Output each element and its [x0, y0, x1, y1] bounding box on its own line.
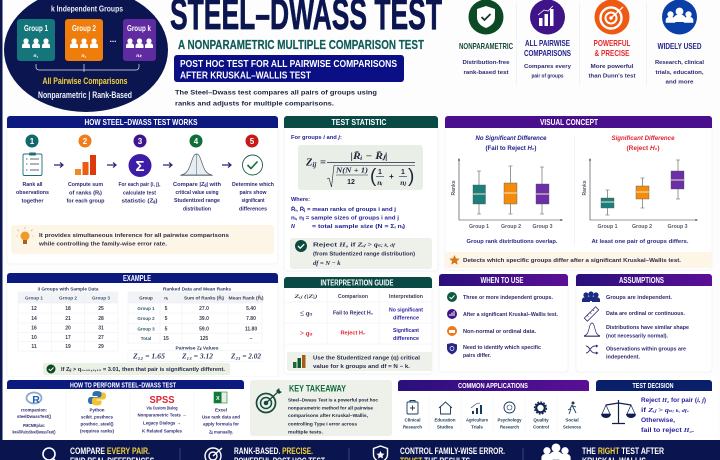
- message: rank-based precise: [234, 446, 326, 460]
- hero oval: k independent groups: Group 2: [72, 23, 96, 33]
- tool: Excel: Zᵢⱼ manually.: [209, 430, 233, 436]
- callout: significance rule: If Zᵢⱼ > q₀.₀₅,₃,₁₂ = 3.01, then that pair is significantly different.: [61, 367, 226, 373]
- message: compare every pair: [70, 446, 156, 460]
- application: agriculture trials: [466, 403, 488, 430]
- formula box: N(N + 1): [335, 168, 368, 174]
- table: sample data: Group 2: [59, 296, 77, 300]
- header: visual concept: VISUAL CONCEPT: [540, 117, 599, 127]
- step 2: for each group: [66, 198, 105, 204]
- step 5: differences: [239, 206, 267, 212]
- chart: significant difference: Group 3: [668, 224, 688, 230]
- table: sample data: 11: [31, 344, 37, 350]
- decision rule: [290, 238, 432, 269]
- table: ranked data: Group: [139, 296, 153, 300]
- definitions: = total sample size (N = Σᵢ nᵢ): [312, 224, 405, 230]
- table: ranked data: 5: [165, 326, 168, 332]
- table: sample data: 21: [65, 316, 71, 322]
- chart: no significant difference: Ranks: [451, 180, 457, 196]
- feature: all pairwise comparisons: pair of groups: [532, 74, 564, 80]
- application: quality control: Control: [533, 424, 549, 430]
- table: ranked data: 59.0: [199, 326, 209, 332]
- arrow: [163, 162, 172, 168]
- formula box: 1: [401, 169, 405, 176]
- feature: all pairwise comparisons: [524, 0, 571, 80]
- pairwise values: Z₁₃ = 3.12: [181, 352, 214, 360]
- hero oval: k independent groups: [4, 0, 168, 112]
- header: example: [7, 273, 278, 283]
- header: common applications: [398, 380, 589, 391]
- item: identify pairs: pairs differ.: [463, 353, 492, 359]
- table: sample data: 17: [65, 335, 71, 341]
- table: ranked data: 125: [200, 336, 208, 342]
- step 1: together: [22, 198, 44, 204]
- feature: nonparametric: Distribution-free: [462, 60, 510, 66]
- icon: balance scale: [601, 400, 636, 424]
- table: interpretation: Comparison: [338, 294, 368, 300]
- table: ranked data: Ranked Data and Mean Ranks: [163, 286, 231, 292]
- formula box: 12: [347, 179, 355, 186]
- callout: simultaneous inference: [11, 225, 274, 254]
- application: psychology research: Psychology: [498, 418, 522, 422]
- header: assumptions: ASSUMPTIONS: [619, 276, 665, 285]
- step 1: observations: [16, 190, 49, 196]
- decision text: Reject H₀ for pair ( i, j): [641, 398, 706, 404]
- callout: detects specific groups: Detects which specific groups differ after a significant Kruskal–Wallis test.: [463, 258, 681, 264]
- step 5: significant: [242, 198, 265, 204]
- table: interpretation: Interpretation: [389, 294, 423, 300]
- panel: common applications: [398, 380, 589, 430]
- table: sample data: 19: [65, 344, 71, 350]
- table: ranked data: 39.0: [199, 316, 209, 322]
- application: psychology research: Research: [500, 424, 519, 430]
- feature: powerful and precise: [588, 0, 636, 80]
- chart: no significant difference: Group 3: [532, 224, 553, 230]
- tool: SPSS: [138, 394, 186, 434]
- item: groups independent: Groups are independent.: [606, 295, 673, 301]
- formula box: ): [408, 166, 414, 187]
- item: identify pairs: Need to identify which specific: [463, 345, 541, 351]
- takeaway text: [288, 398, 378, 436]
- step 3: [118, 134, 161, 204]
- callout: studentized range: value for k groups and df = N − k.: [313, 364, 411, 370]
- application: psychology research: [498, 402, 522, 430]
- hero oval: k independent groups: n₂: [82, 53, 87, 59]
- footer band: [0, 440, 720, 460]
- arrow: [222, 162, 231, 168]
- table: sample data: 29: [98, 344, 104, 350]
- heading: key takeaway: KEY TAKEAWAY: [289, 384, 347, 394]
- panel: bottom white card background: [2, 377, 718, 439]
- step 4: 4: [194, 137, 199, 146]
- table: ranked data: 11.80: [245, 326, 257, 332]
- item: similar shape: [584, 323, 689, 340]
- table: sample data: 16: [31, 326, 37, 332]
- formula box: +: [389, 172, 394, 181]
- chart: significant difference: Ranks: [582, 180, 588, 196]
- step 4: [173, 134, 221, 212]
- step 3: 3: [138, 137, 143, 146]
- step 2: [66, 134, 105, 204]
- message: right test after Kruskal-Wallis: THE RIGHT TEST AFTER: [582, 446, 664, 456]
- table: sample data: 25: [98, 306, 104, 312]
- step 1: 1: [30, 137, 35, 146]
- hero oval: k independent groups: ...: [110, 35, 116, 44]
- tool: Excel: Use rank data and: [202, 414, 240, 420]
- table: sample data: [18, 286, 118, 351]
- step 2: of ranks (Rᵢ): [69, 190, 102, 196]
- tool: Python: [80, 391, 114, 434]
- step 5: pairs show: [240, 190, 267, 196]
- takeaway text: comparisons after Kruskal–Wallis,: [288, 413, 369, 419]
- message: control family-wise error: [400, 446, 505, 460]
- tool: Python: (requires ranks): [80, 428, 114, 434]
- takeaway text: controlling Type I error across: [288, 422, 357, 428]
- chart: significant difference: Group 1: [598, 224, 618, 230]
- icon: magnifier: [43, 448, 58, 460]
- feature: all pairwise comparisons: COMPARISONS: [524, 48, 571, 58]
- table: ranked data: Total: [141, 336, 151, 341]
- header: interpretation guide: [284, 277, 432, 288]
- formula box: Z: [306, 158, 312, 168]
- decision rule: (from Studentized range distribution): [313, 252, 415, 258]
- feature: widely used: [655, 0, 705, 86]
- table: sample data: 12: [31, 306, 37, 312]
- takeaway text: nonparametric method for all pairwise: [288, 406, 373, 412]
- header: test statistic: [284, 116, 438, 128]
- formula box: ij: [312, 161, 316, 169]
- step 1: Rank all: [22, 182, 43, 188]
- table: interpretation: Reject H₀: [340, 330, 366, 336]
- pairwise values: Pairwise Zᵢⱼ Values: [176, 346, 219, 352]
- table: sample data: 18: [65, 306, 71, 312]
- feature: all pairwise comparisons: Compares every: [524, 64, 571, 70]
- step 4: distribution: [183, 206, 211, 212]
- table: ranked data: 5: [165, 306, 168, 312]
- feature: widely used: WIDELY USED: [658, 41, 702, 51]
- label: groups: For groups i and j:: [291, 135, 342, 141]
- table: interpretation: > qα: [300, 328, 313, 338]
- item: observations independent: independent.: [606, 354, 641, 360]
- description: The Steel–Dwass test compares all pairs of groups using: [175, 90, 377, 96]
- feature: nonparametric: NONPARAMETRIC: [459, 41, 513, 51]
- application: social sciences: Social: [565, 418, 579, 422]
- tool: R: R: [32, 394, 40, 406]
- callout: simultaneous inference: while controlling the family-wise error rate.: [38, 242, 167, 248]
- decision text: if Zᵢⱼ > q α; k, df .: [641, 408, 689, 414]
- formula box: nᵢ: [377, 178, 383, 187]
- callout: simultaneous inference: It provides simultaneous inference for all pairwise comparisons: [39, 233, 229, 239]
- table: ranked data: –: [250, 336, 253, 342]
- tool: SPSS: Legacy Dialogs →: [143, 420, 181, 426]
- message: compare every pair: COMPARE EVERY PAIR.: [70, 446, 150, 456]
- application: education studies: Studies: [437, 424, 454, 430]
- table: ranked data: 5: [165, 316, 168, 322]
- tool: R: PMCMRplus:: [23, 423, 45, 428]
- table: interpretation: difference: [393, 336, 419, 342]
- pairwise values: Z₂₃ = 2.02: [230, 352, 262, 360]
- banner: post hoc test: [174, 55, 404, 82]
- step 1: [16, 134, 49, 204]
- table: ranked data: Group 3: [137, 326, 155, 332]
- table: interpretation: Significant: [393, 328, 419, 334]
- chart: no significant difference: (Fail to Reject H₀): [486, 146, 536, 152]
- feature: powerful and precise: More powerful: [590, 64, 634, 70]
- table: sample data: 10: [31, 335, 37, 341]
- decision text: [641, 398, 706, 434]
- application: agriculture trials: Agriculture: [466, 418, 488, 422]
- decision rule: df = N − k: [313, 260, 341, 267]
- table: sample data: 3 Groups with Sample Data: [38, 286, 99, 292]
- tool: Excel: Excel: [215, 408, 227, 412]
- step 4: critical value using: [176, 190, 218, 196]
- panel: assumptions: [576, 274, 712, 372]
- hero oval: k independent groups: n₁: [34, 53, 39, 59]
- item: observations independent: [586, 344, 686, 360]
- header: how to perform: [7, 380, 244, 390]
- step 2: Compute sum: [68, 182, 103, 188]
- decision rule: Reject H₀ if Zᵢⱼ > q α; k, df: [313, 242, 396, 248]
- header: visual concept: [445, 116, 712, 128]
- formula box: nⱼ: [400, 178, 406, 187]
- panel: test decision: [596, 380, 712, 434]
- item: three or more groups: Three or more independent groups.: [463, 295, 554, 301]
- application: education studies: Education: [434, 418, 456, 422]
- feature: powerful and precise: & PRECISE: [594, 48, 630, 58]
- table: sample data: Group 3: [92, 296, 110, 300]
- table: ranked data: nᵢ: [164, 296, 168, 300]
- step 3: Σ: [135, 158, 145, 175]
- table: ranked data: Sum of Ranks (R̄ᵢ): [184, 295, 225, 300]
- tool: Excel: X: [216, 396, 220, 402]
- item: similar shape: (not necessarily normal).: [606, 334, 669, 340]
- application: quality control: [533, 402, 549, 430]
- table: ranked data: 7.80: [246, 316, 256, 322]
- arrow: [107, 162, 116, 168]
- icon: shield: [374, 446, 388, 460]
- chart: significant difference: Significant Difference: [612, 136, 675, 142]
- chart: no significant difference: Group rank distributions overlap.: [466, 239, 558, 245]
- chart: significant difference: (Reject H₀): [626, 146, 660, 152]
- application: quality control: Quality: [533, 418, 549, 422]
- table: ranked data: [128, 286, 264, 343]
- table: sample data: 28: [98, 316, 104, 322]
- feature: nonparametric: [459, 0, 513, 76]
- tool: R: steelDwassTest(): [17, 414, 51, 419]
- step 4: Compare |Zᵢⱼ| with: [173, 182, 221, 188]
- table: sample data: 20: [65, 326, 71, 332]
- definitions: Where:: [291, 197, 310, 203]
- item: ordinal data: Data are ordinal or continuous.: [606, 311, 686, 317]
- tool: R: rcompanion:: [21, 408, 47, 412]
- panel: how to perform: [7, 380, 244, 436]
- item: non-normal data: Non-normal or ordinal data.: [463, 329, 537, 335]
- decision text: Otherwise,: [641, 418, 675, 424]
- pairwise values: Z₁₂ = 1.65: [132, 352, 166, 360]
- panel: example: [7, 273, 278, 377]
- panel: visual concept: [445, 116, 712, 270]
- tool: SPSS: Via Custom Dialog: [146, 406, 178, 410]
- description: ranks and adjusts for multiple comparisons.: [175, 100, 334, 108]
- table: interpretation: Zᵢⱼ (|Z|): [293, 293, 318, 300]
- definitions: R̄ᵢ, R̄ⱼ = mean ranks of groups i and j: [291, 206, 397, 213]
- definitions: nᵢ, nⱼ = sample sizes of groups i and j: [291, 216, 400, 222]
- table: interpretation: Fail to Reject H₀: [333, 310, 374, 316]
- callout: studentized range: Use the Studentized range (q) critical: [313, 356, 421, 362]
- takeaway text: multiple tests.: [288, 430, 324, 436]
- formula box: |R̄ᵢ − R̄ⱼ|: [350, 151, 388, 162]
- application: social sciences: Sciences: [563, 424, 581, 430]
- table: ranked data: 5.40: [246, 306, 256, 312]
- header: how to perform: HOW TO PERFORM STEEL–DWASS TEST: [70, 380, 176, 390]
- callout: significance rule: [43, 363, 230, 375]
- table: interpretation: difference: [393, 316, 419, 322]
- subtitle: A NONPARAMETRIC MULTIPLE COMPARISON TEST: [178, 38, 424, 52]
- panel: when to use: [439, 274, 568, 372]
- header: when to use: WHEN TO USE: [480, 276, 524, 285]
- callout: detects specific groups: [445, 252, 712, 268]
- panel: test statistic: [284, 116, 438, 271]
- tool: SPSS: Nonparametric Tests →: [138, 412, 186, 418]
- chart: no significant difference: No Significant Difference: [476, 136, 547, 142]
- application: agriculture trials: Trials: [471, 424, 483, 430]
- step 4: Studentized range: [174, 198, 220, 204]
- decision text: fail to reject H₀.: [641, 428, 694, 434]
- panel: how Steel-Dwass test works: [7, 116, 278, 264]
- hero oval: k independent groups: Nonparametric | Rank-Based: [38, 90, 132, 100]
- message: right test after Kruskal-Wallis: [582, 446, 664, 460]
- chart: significant difference: Group 2: [632, 224, 652, 230]
- tool: SPSS: SPSS: [150, 394, 174, 406]
- item: observations independent: Observations within groups are: [606, 346, 686, 352]
- table: interpretation: ≤ qα: [300, 308, 312, 318]
- feature: widely used: Research, clinical: [655, 60, 705, 66]
- table: sample data: 27: [98, 335, 104, 341]
- feature: widely used: trials, education,: [656, 70, 704, 76]
- step 5: 5: [250, 137, 255, 146]
- item: similar shape: Distributions have similar shape: [606, 325, 689, 331]
- table: ranked data: Group 1: [137, 306, 155, 311]
- application: clinical research: Clinical: [404, 418, 421, 422]
- icon: target: [256, 388, 282, 412]
- feature: all pairwise comparisons: ALL PAIRWISE: [525, 38, 570, 48]
- tool: Python: posthoc_steel(): [80, 422, 114, 426]
- banner: post hoc test: POST HOC TEST FOR ALL PAIRWISE COMPARISONS: [180, 59, 397, 70]
- definitions: [291, 197, 405, 230]
- application: social sciences: [563, 402, 581, 430]
- table: ranked data: Mean Rank (R̄ᵢ): [228, 295, 264, 300]
- item: after Kruskal-Wallis: After a significant Kruskal–Wallis test.: [463, 312, 559, 318]
- table: interpretation: [284, 288, 432, 344]
- application: education studies: [434, 402, 456, 430]
- formula box: (: [370, 166, 377, 187]
- frame edges: [0, 0, 2, 460]
- header: interpretation guide: INTERPRETATION GUIDE: [320, 278, 394, 288]
- header: test statistic: TEST STATISTIC: [332, 117, 386, 127]
- table: ranked data: 15: [163, 336, 169, 342]
- step 3: calculate test: [123, 190, 156, 196]
- formula box: 1: [378, 169, 382, 176]
- takeaway text: Steel–Dwass Test is a powerful post hoc: [288, 398, 378, 404]
- tool: Python: scikit_posthocs: [81, 414, 113, 420]
- icon: people: [541, 443, 571, 460]
- application: clinical research: Research: [403, 424, 422, 430]
- message: control family-wise error: CONTROL FAMILY-WISE ERROR.: [400, 446, 505, 456]
- banner: post hoc test: AFTER KRUSKAL–WALLIS TEST: [180, 70, 311, 82]
- tool: SPSS: K Related Samples: [142, 428, 182, 434]
- header: how it works: [7, 116, 278, 128]
- chart: no significant difference: [451, 136, 563, 245]
- header: common applications: COMMON APPLICATIONS: [458, 381, 528, 390]
- tool: Excel: [202, 392, 240, 436]
- table: ranked data: Group 2: [137, 316, 155, 321]
- formula box: [298, 145, 423, 190]
- item: identify pairs: [447, 343, 541, 359]
- hero oval: k independent groups: Group 1: [24, 23, 48, 33]
- table: ranked data: 27.0: [199, 306, 209, 312]
- hero oval: k independent groups: nₖ: [136, 53, 142, 59]
- feature: widely used: and more: [666, 80, 694, 86]
- table: sample data: 31: [98, 326, 104, 332]
- message: rank-based precise: RANK-BASED. PRECISE.: [234, 446, 313, 456]
- step 5: Determine which: [232, 182, 274, 188]
- icon: target: [205, 448, 222, 460]
- feature: powerful and precise: POWERFUL: [594, 38, 630, 48]
- pairwise values: [128, 346, 262, 362]
- tool: Excel: apply formula for: [203, 422, 239, 426]
- callout: studentized range: [287, 352, 432, 371]
- step 3: For each pair (i, j),: [118, 182, 161, 188]
- hero oval: k independent groups: k Independent Groups: [51, 4, 123, 14]
- feature: nonparametric: rank-based test: [464, 70, 509, 76]
- tool: R: kwAllPairsSteelDwassTest(): [12, 430, 56, 434]
- table: sample data: 14: [31, 316, 37, 322]
- header: how it works: HOW STEEL–DWASS TEST WORKS: [84, 117, 198, 127]
- description: [175, 90, 377, 108]
- chart: no significant difference: Group 2: [501, 224, 521, 230]
- panel: key takeaway: [250, 380, 392, 436]
- chart: no significant difference: Group 1: [469, 224, 489, 230]
- definitions: N: [291, 224, 295, 230]
- hero oval: k independent groups: All Pairwise Comparisons: [42, 76, 128, 86]
- arrow: [54, 162, 63, 168]
- chart: significant difference: At least one pair of groups differs.: [592, 239, 689, 245]
- chart: significant difference: [582, 136, 698, 245]
- table: interpretation: No significant: [389, 308, 423, 314]
- header: example: EXAMPLE: [123, 274, 151, 283]
- step 2: 2: [83, 137, 88, 146]
- panel: interpretation guide: [284, 277, 432, 374]
- tool: R: [12, 392, 56, 434]
- header: test decision: TEST DECISION: [632, 381, 674, 390]
- step 5: [232, 134, 274, 212]
- hero oval: k independent groups: Group k: [127, 23, 151, 33]
- step 3: statistic (Zᵢⱼ): [122, 198, 158, 204]
- feature: powerful and precise: than Dunn's test: [588, 74, 636, 80]
- table: sample data: Group 1: [25, 296, 43, 300]
- tool: Python: Python: [90, 408, 105, 412]
- application: clinical research: [403, 400, 422, 430]
- formula box: =: [317, 158, 326, 168]
